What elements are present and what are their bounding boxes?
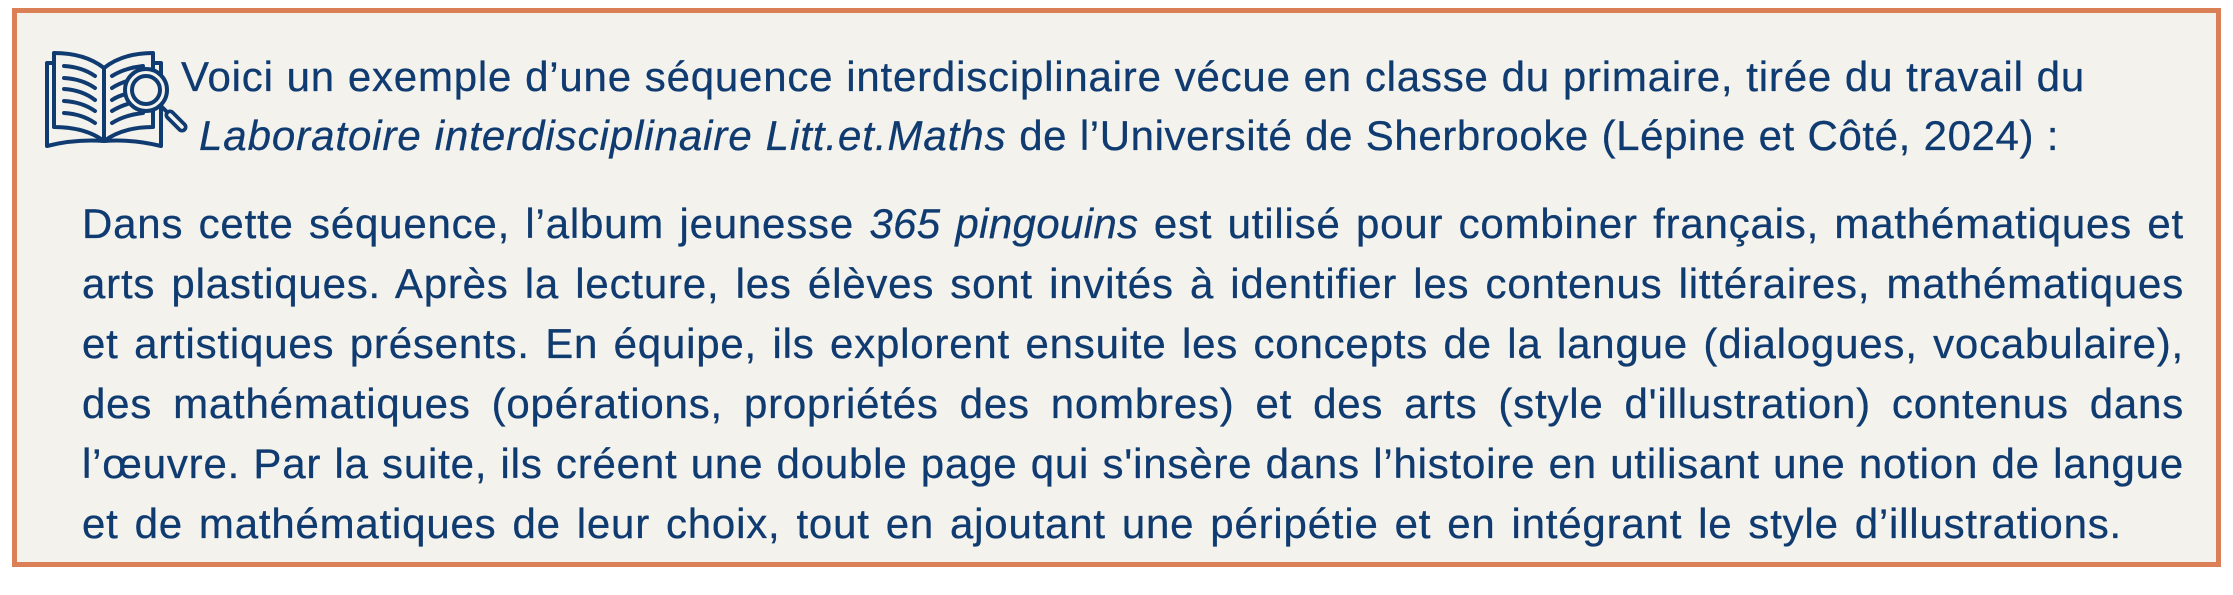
text block: sequence description — [82, 200, 2184, 547]
text block: sequence description: et de mathématiques de leur choix, tout en ajoutant une péripétie et en intégrant le style d’illustrations. — [82, 500, 2122, 547]
text block: sequence description: et artistiques présents. En équipe, ils explorent ensuite les concepts de la langue (dialogues, vocabulaire), — [82, 320, 2184, 367]
text block: sequence description: Dans cette séquence, l’album jeunesse 365 pingouins est utilisé pour combiner français, mathématiques et — [82, 200, 2184, 247]
heading: introduction: Voici un exemple d’une séquence interdisciplinaire vécue en classe du primaire, tirée du travail du — [181, 53, 2085, 100]
icon: open book with magnifying glass — [45, 51, 188, 148]
heading: introduction — [181, 53, 2085, 159]
text block: sequence description: l’œuvre. Par la suite, ils créent une double page qui s'insère dans l’histoire en utilisant une notion de langue — [82, 440, 2184, 487]
text block: sequence description: des mathématiques (opérations, propriétés des nombres) et des arts (style d'illustration) contenus dans — [82, 380, 2184, 427]
heading: introduction: Laboratoire interdisciplinaire Litt.et.Maths de l’Université de Sherbrooke (Lépine et Côté, 2024) : — [199, 112, 2059, 159]
text block: sequence description: arts plastiques. Après la lecture, les élèves sont invités à identifier les contenus littéraires, mathématiques — [82, 260, 2184, 307]
